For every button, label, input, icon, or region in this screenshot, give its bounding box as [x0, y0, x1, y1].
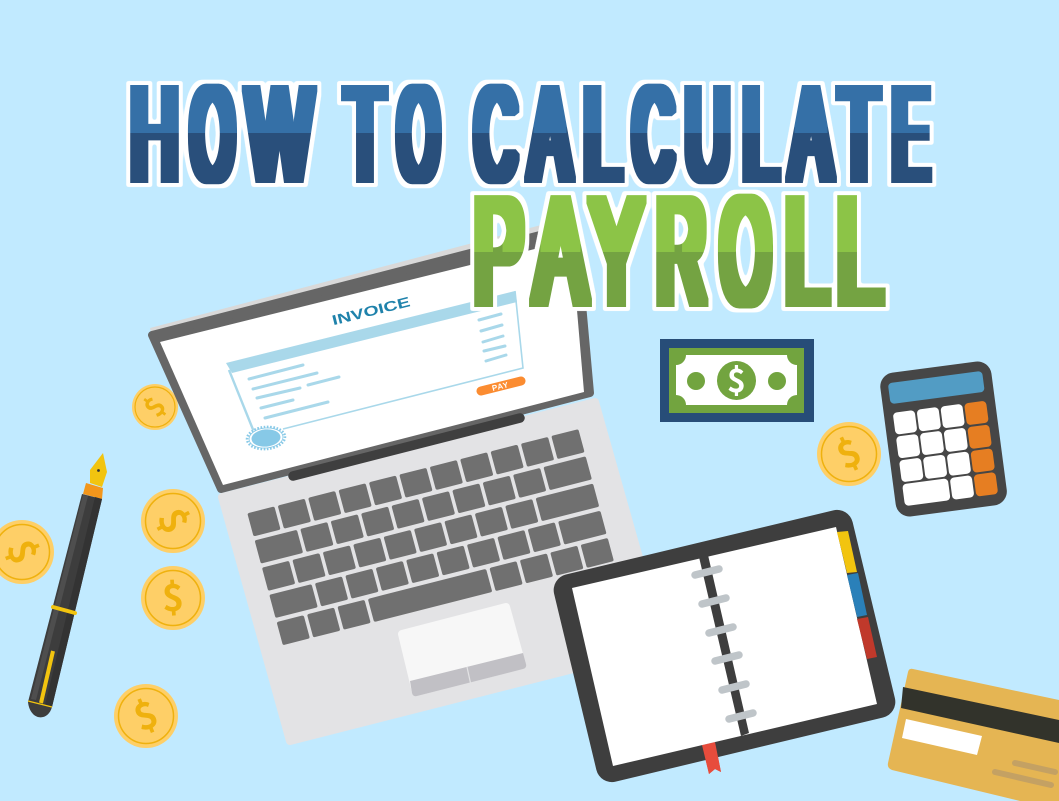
icon: coin upper: [141, 489, 205, 553]
pen nib: [90, 453, 107, 487]
icon: coin upper: $: [147, 497, 205, 542]
title: how to calculate: A: [791, 60, 831, 209]
keyboard: [247, 429, 614, 645]
bookmark: [702, 742, 721, 774]
invoice header band: [226, 291, 517, 373]
pay button: PAY: [491, 380, 510, 393]
notebook spine: [699, 555, 749, 736]
title: payroll: O: [721, 166, 770, 335]
icon: coin beside calculator: $: [826, 422, 869, 480]
icon: coin middle: $: [161, 567, 185, 623]
calculator orange keys: [964, 401, 998, 497]
icon: coin behind laptop: $: [133, 388, 174, 424]
invoice text lines: [249, 314, 506, 418]
title: how to calculate: C: [475, 60, 516, 209]
icon: coin behind laptop: [132, 384, 178, 430]
icon: calculator: [879, 360, 1009, 518]
icon: coin lower: $: [125, 684, 165, 742]
icon: coin lower: [114, 684, 178, 748]
title: how to calculate: T: [840, 60, 878, 209]
icon: coin beside calculator: [817, 422, 881, 486]
card stripe: [901, 687, 1059, 743]
title: how to calculate: H: [131, 60, 178, 209]
title: how to calculate: U: [686, 60, 729, 209]
pen clip: [41, 651, 53, 703]
calculator display: [888, 371, 985, 404]
laptop: [150, 220, 664, 741]
card signature strip: [902, 719, 982, 755]
title: how to calculate: O: [191, 60, 234, 209]
invoice form outline: [229, 291, 523, 430]
laptop lid rim: [150, 220, 560, 336]
icon: dollar bill: [660, 339, 814, 422]
pay button: [481, 380, 521, 393]
invoice title: INVOICE: [330, 293, 412, 328]
bookmark front: [702, 742, 721, 774]
bill white note: [676, 355, 797, 405]
title: how to calculate: A: [530, 60, 570, 209]
pen ring: [53, 607, 75, 613]
title: payroll: L: [836, 166, 882, 335]
title: how to calculate: L: [743, 60, 778, 209]
icon: notebook: [550, 507, 899, 785]
invoice on screen: [226, 291, 523, 451]
hinge: [293, 418, 520, 476]
title: payroll: Y: [591, 166, 642, 335]
notebook pages: [572, 527, 877, 766]
title: payroll: L: [785, 166, 828, 335]
pen collar: [83, 483, 103, 499]
title: how to calculate: O: [398, 60, 438, 209]
icon: credit card: [888, 669, 1059, 801]
notebook tabs: [837, 531, 877, 659]
pen body: [28, 494, 102, 717]
notebook cover: [550, 507, 899, 785]
title: how to calculate: L: [584, 60, 621, 209]
notebook rings: [695, 569, 753, 719]
trackpad: [402, 607, 526, 696]
title: payroll: R: [657, 166, 706, 335]
invoice left edge: [229, 370, 254, 432]
laptop screen bezel: [152, 226, 590, 489]
title: how to calculate: W: [247, 60, 312, 209]
card number lines: [1015, 763, 1055, 772]
text: E: [893, 60, 929, 209]
laptop screen: [160, 240, 584, 485]
invoice seal: [246, 425, 286, 451]
icon: coin left edge: [0, 520, 54, 584]
icon: coin middle: [141, 566, 205, 630]
calculator number keys: [893, 404, 974, 506]
title: payroll: A: [535, 166, 586, 335]
title: how to calculate: T: [346, 60, 384, 209]
laptop base: [222, 402, 664, 741]
title: payroll: P: [474, 166, 523, 335]
icon: fountain pen: [28, 453, 107, 717]
bill dollar sign: $: [727, 356, 746, 402]
title: how to calculate: C: [633, 60, 673, 209]
trackpad buttons: [410, 653, 526, 696]
